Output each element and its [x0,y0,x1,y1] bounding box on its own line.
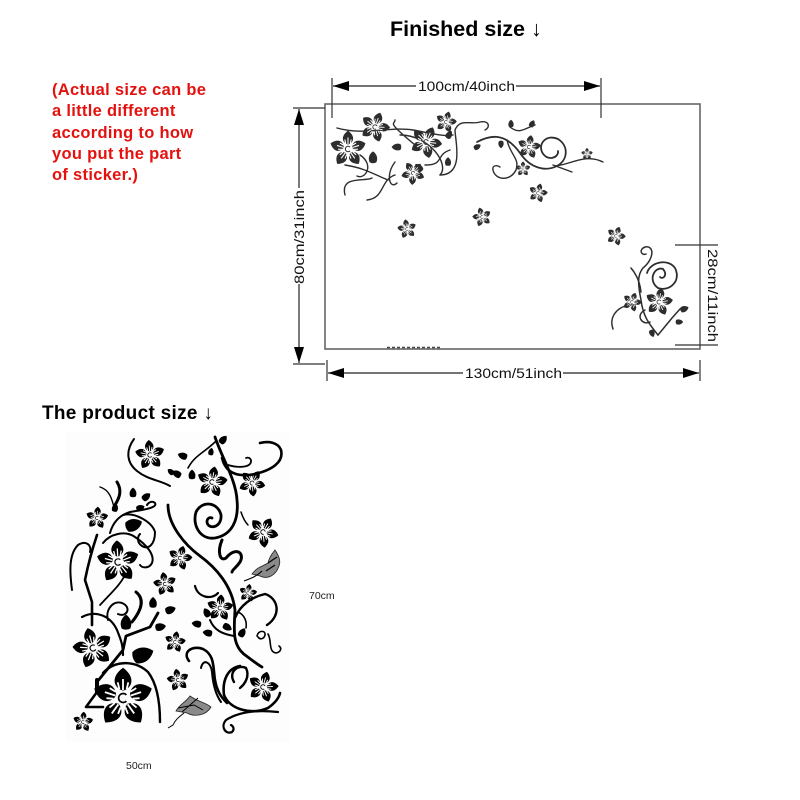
title: finished size: Finished size ↓ [390,17,542,41]
heading: product size: The product size ↓ [42,403,213,424]
label: sheet width 50cm: 50cm [126,760,152,772]
dimension: wall width 130cm/51inch: 130cm/51inch [465,365,562,381]
left flower cluster vines [70,439,170,722]
red note: actual size disclaimer: a little different [52,102,176,120]
right vines [168,437,281,733]
sheet backing [66,431,290,742]
butterfly upper [244,550,280,581]
dimension: corner vine height 28cm/11inch [675,245,721,345]
illustration: top floral vine on wall [329,107,603,200]
butterfly lower [168,696,211,728]
buds and leaves [111,434,248,665]
panel: finished wall frame [325,104,700,349]
red note: actual size disclaimer: you put the part [52,145,182,163]
sticker flowers [67,439,285,733]
label: sheet height 70cm: 70cm [309,590,335,602]
dimension: corner vine height 28cm/11inch: 28cm/11inch [705,249,721,342]
illustration: scattered small flowers on wall [395,181,629,248]
clipped caption fragment on frame edge [387,346,441,348]
red note: actual size disclaimer: of sticker.) [52,166,138,184]
illustration: sticker sheet artwork [66,431,290,742]
dimension: wall height 80cm/31inch: 80cm/31inch [291,190,307,284]
dimension: width of top vine 100cm/40inch: 100cm/40inch [418,78,515,94]
dimension: wall height 80cm/31inch [291,108,325,364]
dimension: wall width 130cm/51inch [327,360,700,381]
red note: actual size disclaimer [52,81,206,184]
red note: actual size disclaimer: (Actual size can be [52,81,206,99]
illustration: corner floral vine on wall [612,247,690,338]
dimension: width of top vine 100cm/40inch [332,78,601,118]
red note: actual size disclaimer: according to how [52,124,193,142]
